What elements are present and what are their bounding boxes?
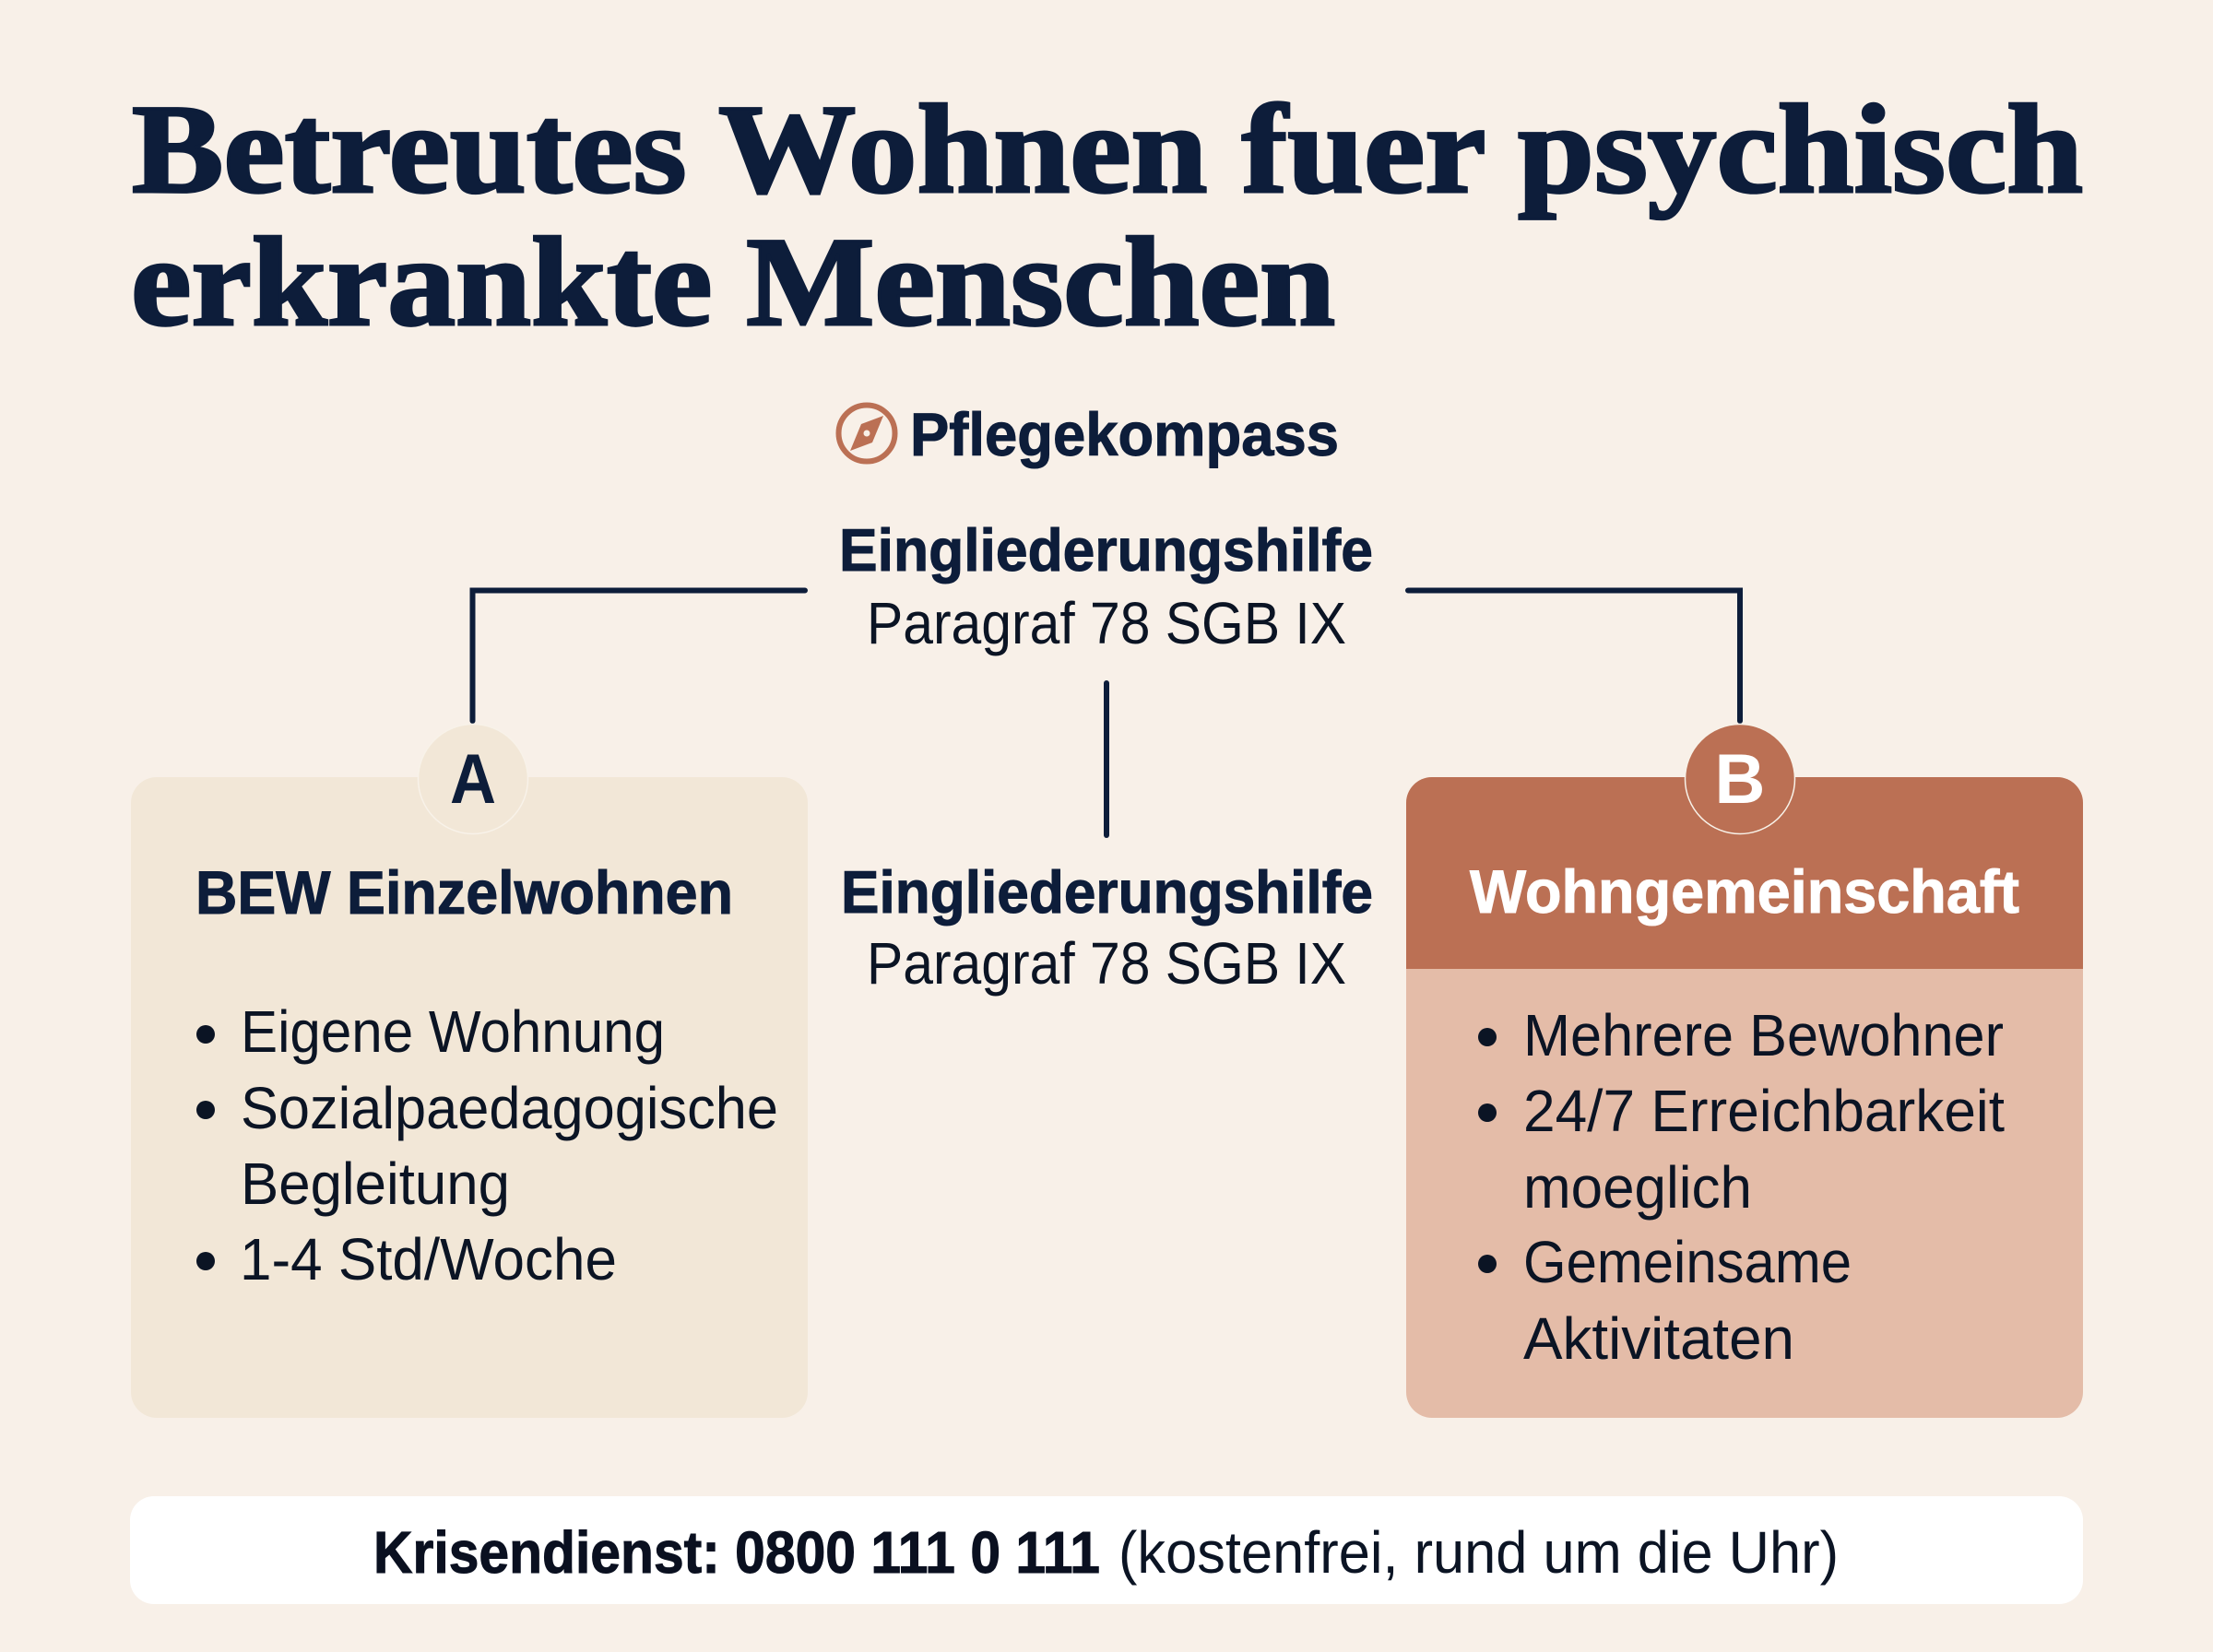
icon: compass — [839, 406, 894, 461]
top label: Eingliederungshilfe: Eingliederungshilfe — [839, 516, 1373, 584]
bullet list: Mehrere Bewohner — [1523, 1002, 2004, 1068]
middle label: Eingliederungshilfe — [841, 858, 1373, 997]
bullet list — [1478, 1002, 2005, 1372]
bullet list: 1-4 Std/Woche — [240, 1226, 617, 1292]
middle label: Eingliederungshilfe: Paragraf 78 SGB IX — [867, 930, 1346, 997]
panel heading: BEW Einzelwohnen — [195, 858, 733, 926]
bullet list: Sozialpaedagogische — [241, 1075, 778, 1141]
top label: Eingliederungshilfe — [839, 516, 1373, 656]
bullet list: moeglich — [1523, 1154, 1752, 1221]
badge: A: A — [450, 740, 496, 819]
footer: crisis hotline: (kostenfrei, rund um die Uhr) — [1118, 1519, 1839, 1586]
top label: Eingliederungshilfe: Paragraf 78 SGB IX — [867, 590, 1346, 656]
footer: crisis hotline — [130, 1496, 2083, 1604]
title: Betreutes Wohnen fuer psychisch — [132, 78, 2083, 219]
badge: B — [1686, 725, 1794, 833]
panel: Wohngemeinschaft — [1406, 725, 2083, 1418]
badge: B: B — [1715, 740, 1765, 819]
bullet list: Eigene Wohnung — [241, 998, 665, 1065]
middle label: Eingliederungshilfe: Eingliederungshilfe — [841, 858, 1373, 926]
footer: crisis hotline: Krisendienst: 0800 111 0 111 — [373, 1519, 1100, 1586]
title — [131, 78, 2083, 352]
bullet list: Aktivitaten — [1523, 1305, 1794, 1372]
bullet list: Begleitung — [241, 1150, 510, 1217]
brand: Pflegekompass: Pflegekompass — [910, 400, 1339, 468]
title: erkrankte Menschen — [131, 211, 1335, 352]
panel: BEW Einzelwohnen — [131, 725, 808, 1418]
badge: A — [419, 725, 527, 833]
bullet list: 24/7 Erreichbarkeit — [1523, 1078, 2005, 1144]
bullet list — [196, 998, 778, 1292]
connector lines — [472, 590, 1740, 835]
bullet list: Gemeinsame — [1523, 1229, 1852, 1295]
panel heading: Wohngemeinschaft — [1470, 857, 2019, 926]
